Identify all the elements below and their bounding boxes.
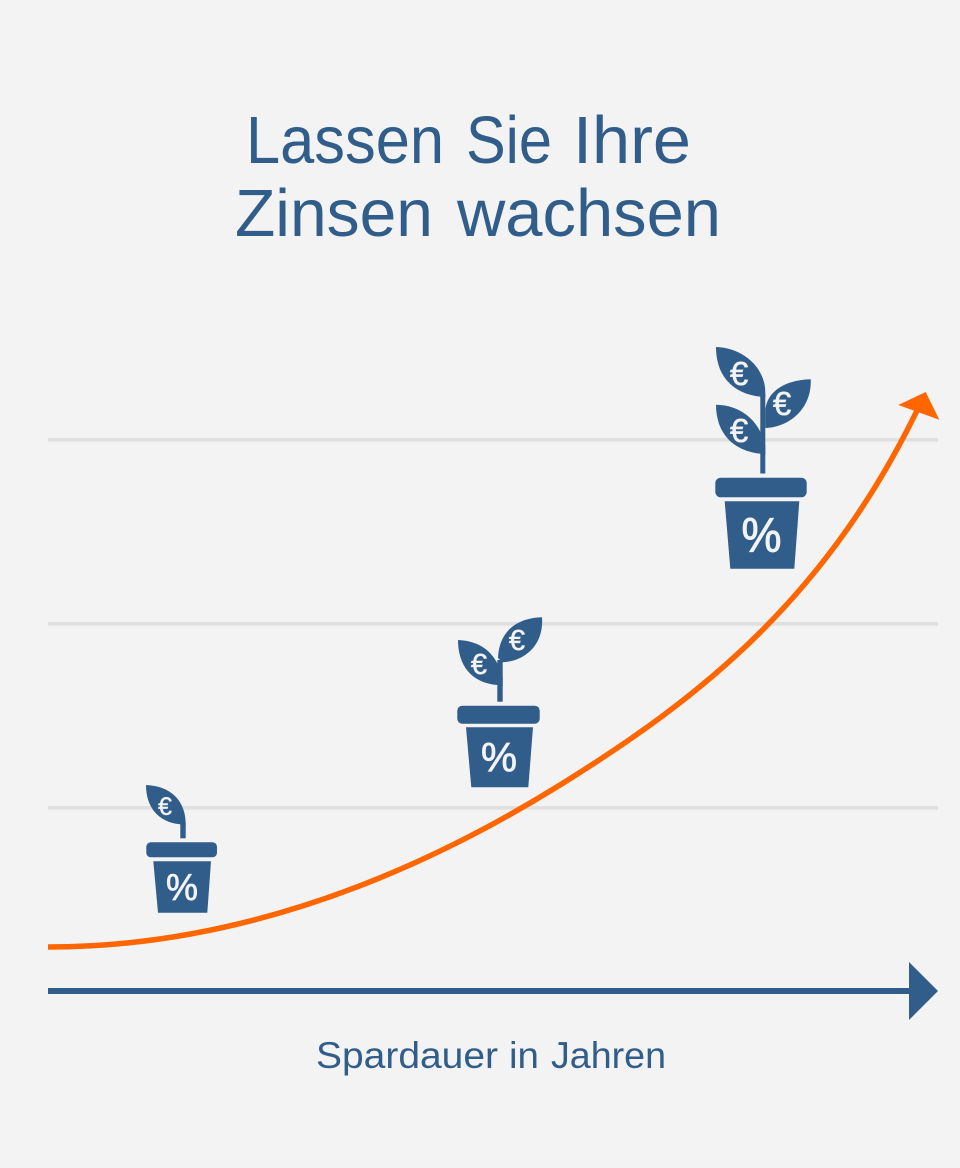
plant: small with one euro leaf xyxy=(146,785,217,913)
title: Zinsen xyxy=(235,176,433,251)
plant: medium with two euro leaves xyxy=(457,617,542,787)
title: wachsen xyxy=(456,176,721,251)
title: Sie xyxy=(466,103,552,178)
title xyxy=(235,103,721,251)
plant: large with three euro leaves: € xyxy=(730,412,748,449)
axis label: Spardauer xyxy=(316,1035,498,1076)
plant: medium with two euro leaves: % xyxy=(481,734,517,780)
title: Ihre xyxy=(573,103,691,178)
axis label: Jahren xyxy=(551,1035,666,1076)
title: Lassen xyxy=(246,103,444,178)
plant: medium with two euro leaves: € xyxy=(471,649,487,681)
plant: large with three euro leaves xyxy=(715,347,811,569)
axis label xyxy=(316,1035,666,1076)
plant: large with three euro leaves: € xyxy=(773,385,791,422)
plant: large with three euro leaves: % xyxy=(742,510,782,562)
plant: small with one euro leaf: % xyxy=(166,867,198,908)
time axis arrow xyxy=(48,962,938,1020)
orange growth curve arrow xyxy=(48,392,939,947)
axis label: in xyxy=(509,1035,539,1076)
plant: medium with two euro leaves: € xyxy=(509,625,525,657)
plant: small with one euro leaf: € xyxy=(158,793,172,821)
plant: large with three euro leaves: € xyxy=(730,355,748,392)
